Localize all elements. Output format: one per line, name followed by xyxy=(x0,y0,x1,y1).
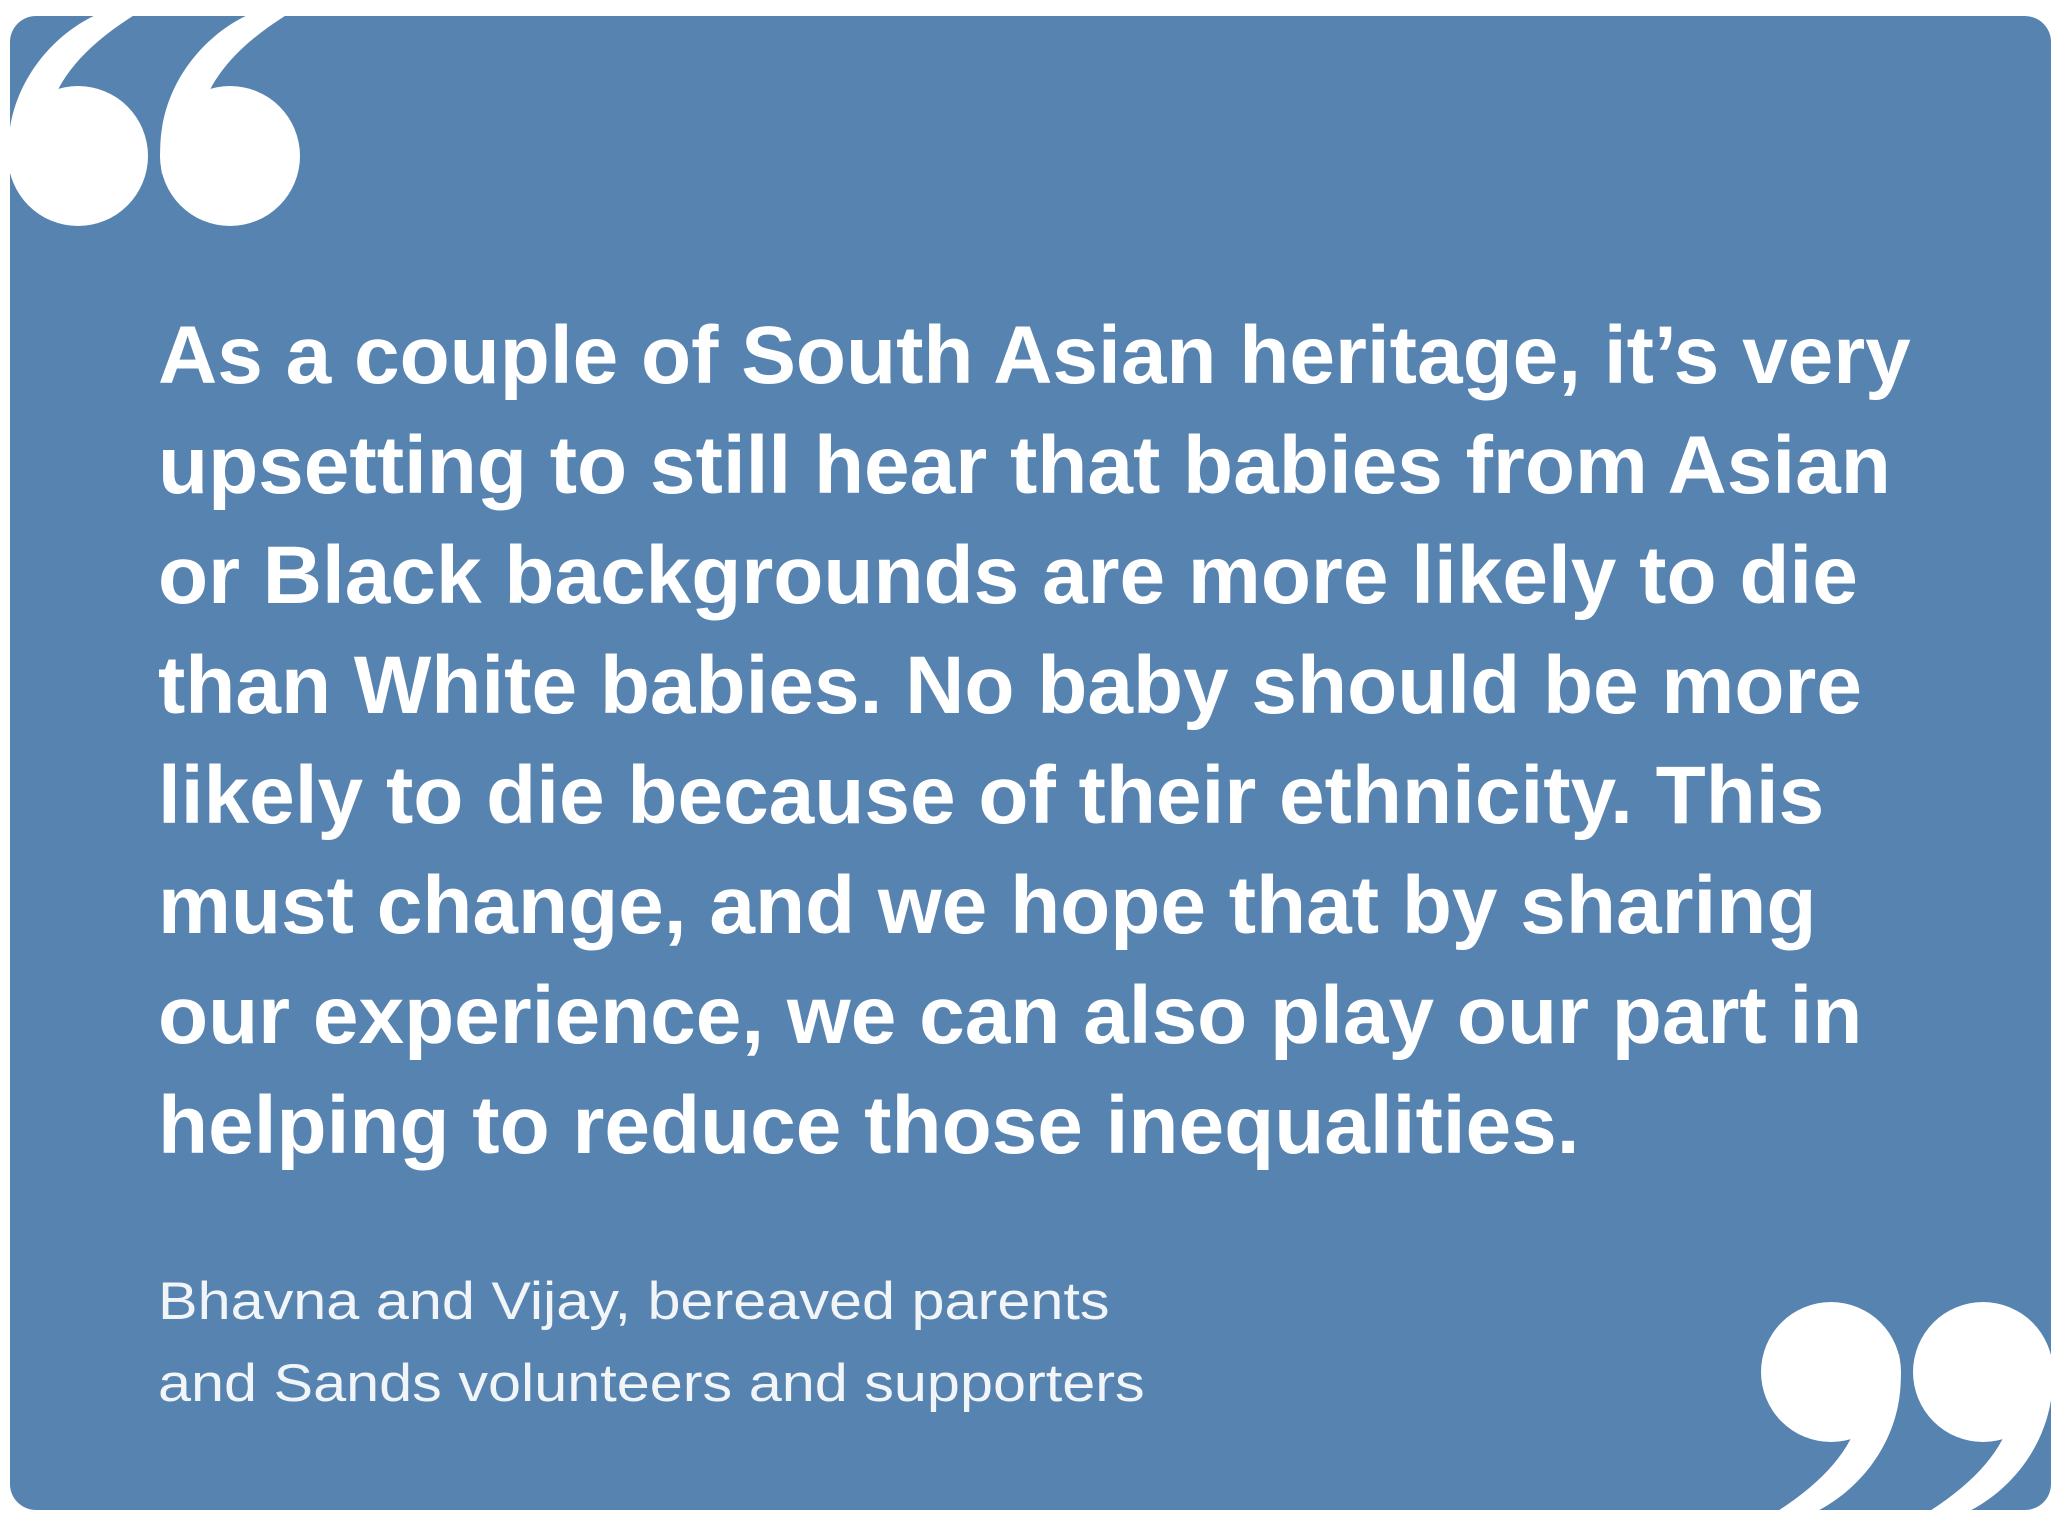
quote text: upsetting to still hear that babies from Asian xyxy=(158,420,1891,511)
quote text: than White babies. No baby should be more xyxy=(158,640,1862,731)
attribution: and Sands volunteers and supporters xyxy=(158,1354,1145,1413)
attribution: Bhavna and Vijay, bereaved parents xyxy=(158,1272,1110,1331)
quote text: likely to die because of their ethnicity. This xyxy=(158,750,1824,841)
quote text: As a couple of South Asian heritage, it’s very xyxy=(158,310,1911,401)
quote text: our experience, we can also play our part in xyxy=(158,970,1862,1061)
icon: opening quote xyxy=(8,14,300,226)
quote text: must change, and we hope that by sharing xyxy=(158,860,1816,951)
attribution xyxy=(158,1272,1145,1413)
quote text: helping to reduce those inequalities. xyxy=(158,1080,1580,1171)
quote text xyxy=(158,310,1911,1171)
quote text: or Black backgrounds are more likely to die xyxy=(158,530,1858,621)
icon: closing quote xyxy=(1761,1302,2053,1514)
